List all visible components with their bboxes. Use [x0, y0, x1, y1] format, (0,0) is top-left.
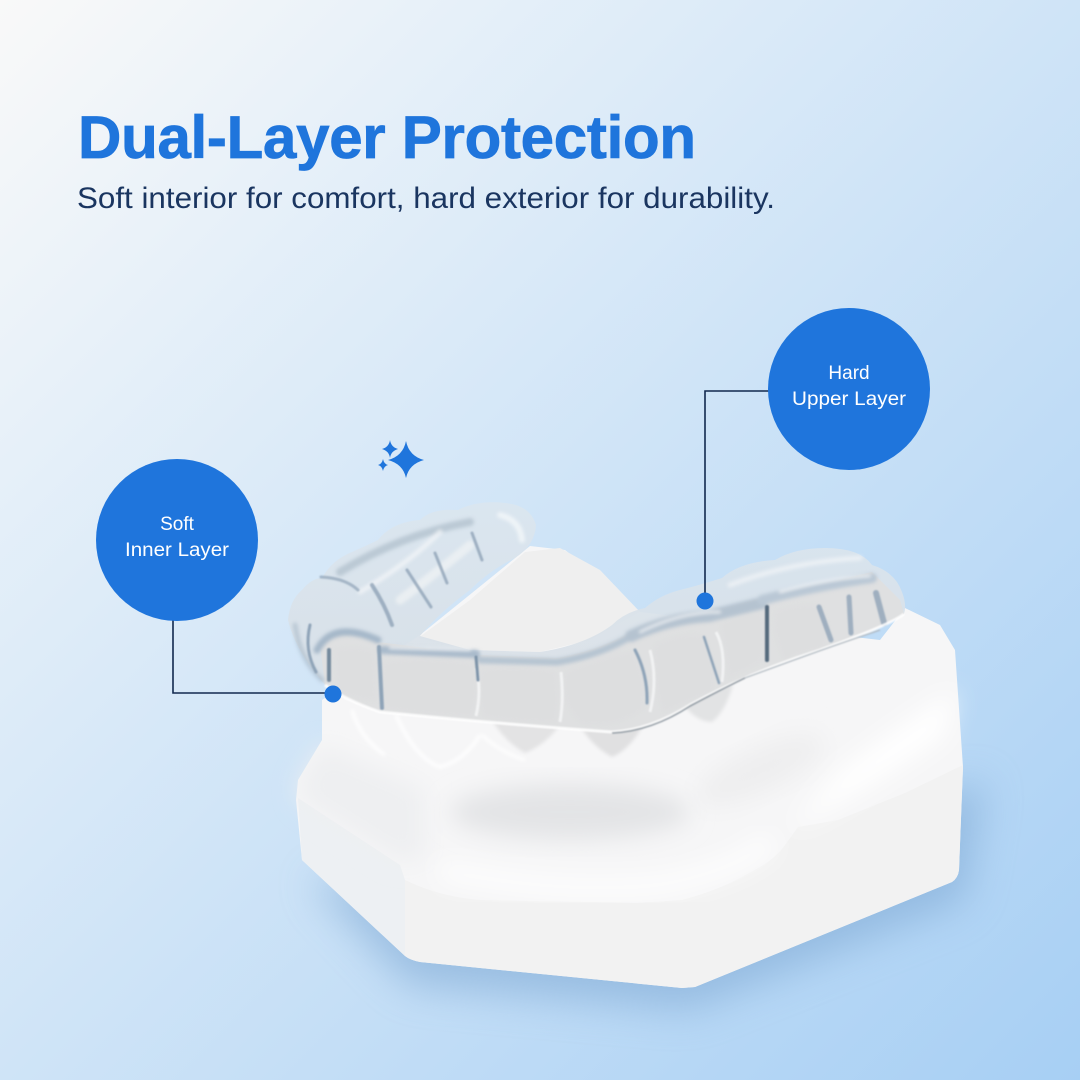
clear guard body [288, 502, 905, 732]
plaster inner arch [418, 548, 640, 652]
plaster upper shading [298, 690, 955, 888]
subtitle: Soft interior for comfort, hard exterior for durability. [77, 182, 775, 215]
guard tooth gaps [476, 632, 723, 722]
guard bottom edge highlight [325, 614, 904, 733]
circle badge [768, 308, 930, 470]
badge label: Soft [160, 514, 195, 535]
leader line [705, 391, 780, 601]
circle badge [96, 459, 258, 621]
anchor dot [324, 686, 342, 702]
plaster base silhouette [296, 546, 963, 988]
leader line [173, 610, 333, 693]
guard near-side wall [320, 572, 904, 732]
callout: hard upper layer: Upper Layer [792, 389, 907, 410]
guard ridge band [317, 576, 872, 662]
icon: sparkles [378, 440, 424, 478]
guard far rim shading [295, 515, 860, 680]
plaster tooth roots below guard [352, 685, 733, 767]
title: Dual-Layer Protection [78, 104, 696, 171]
dental model with clear guard [288, 502, 985, 1010]
plaster lower front band [405, 765, 963, 988]
callout: hard upper layer [696, 308, 930, 610]
plaster lower left face [298, 798, 405, 956]
badge label: Hard [828, 363, 870, 384]
guard tooth separators [308, 533, 884, 708]
callout: soft inner layer: Inner Layer [125, 540, 230, 561]
callout: soft inner layer [96, 459, 342, 702]
model shadow [310, 780, 985, 1010]
guard teeth [335, 605, 827, 725]
anchor dot [696, 592, 714, 610]
